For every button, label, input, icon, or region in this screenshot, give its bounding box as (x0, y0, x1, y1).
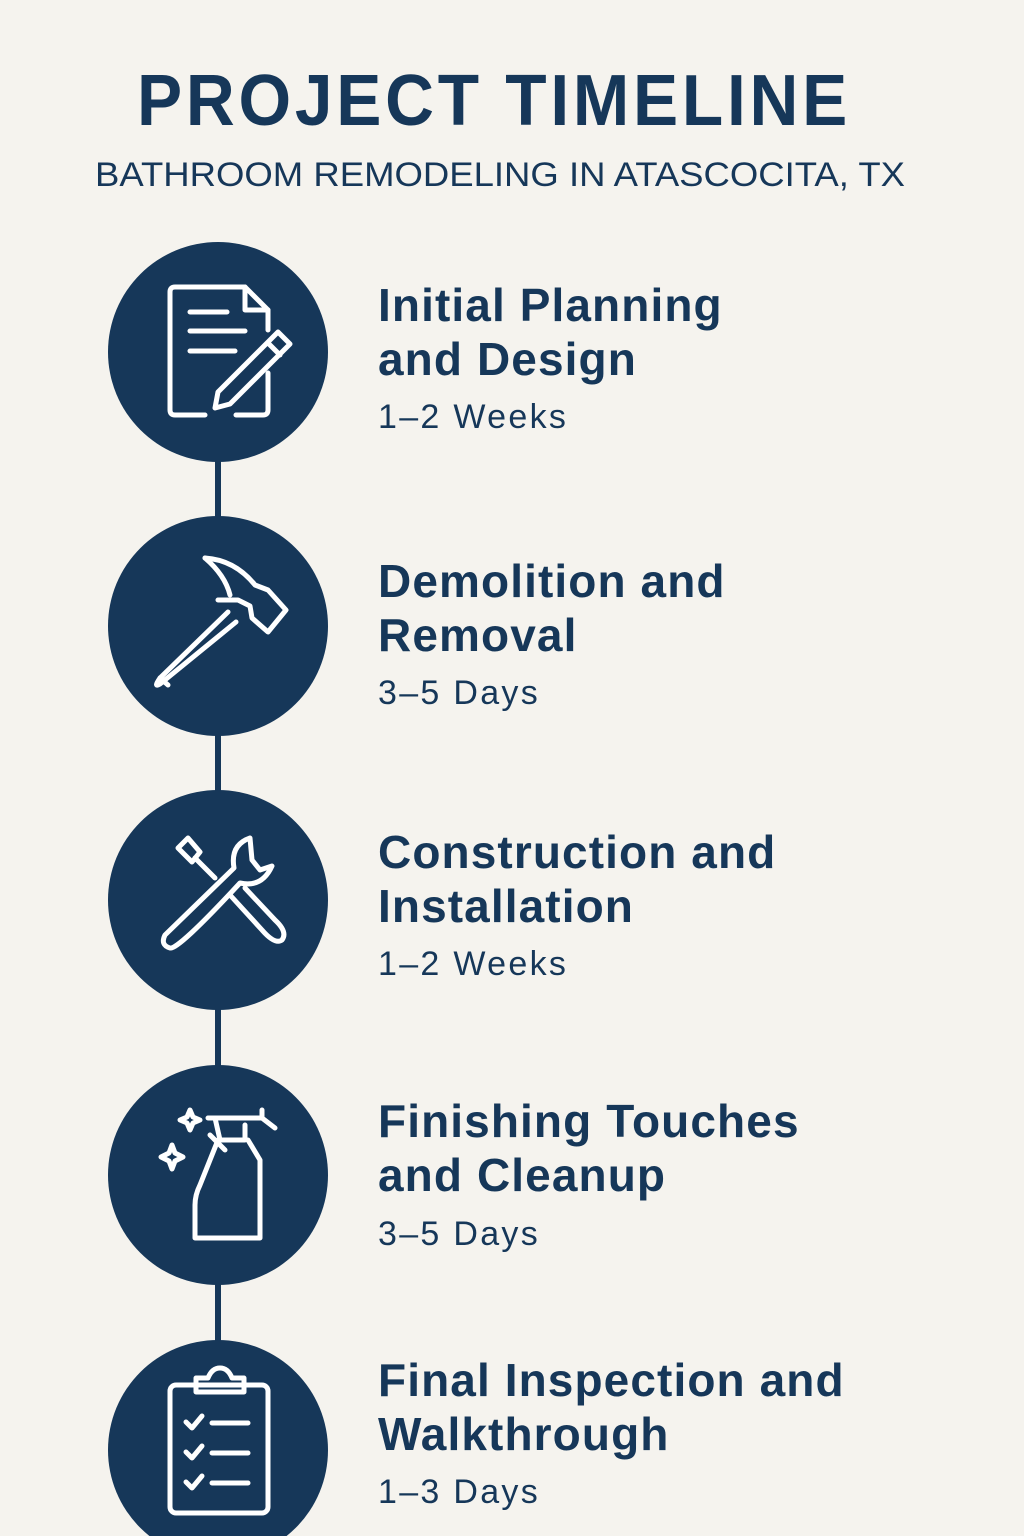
step 1 heading: Initial Planning (378, 279, 723, 331)
step 1: planning (108, 242, 723, 462)
step 3 duration: 1–2 Weeks (378, 945, 568, 983)
icon: document with pencil (108, 242, 328, 462)
icon: wrench and screwdriver (108, 790, 328, 1010)
step 2: demolition: Removal (378, 609, 577, 661)
step 1: planning: and Design (378, 333, 637, 385)
step 3: construction (108, 790, 776, 1010)
step 4: finishing: and Cleanup (378, 1149, 666, 1201)
icon: clipboard checklist (108, 1340, 328, 1536)
subtitle: BATHROOM REMODELING IN ATASCOCITA, TX (95, 156, 905, 194)
step 2 heading: Demolition and (378, 555, 726, 607)
step 4 duration: 3–5 Days (378, 1215, 540, 1253)
step 1 duration: 1–2 Weeks (378, 398, 568, 436)
step 3 heading: Construction and (378, 826, 776, 878)
step 5: inspection: Walkthrough (378, 1408, 669, 1460)
step 5: inspection (108, 1340, 845, 1536)
step 2 duration: 3–5 Days (378, 674, 540, 712)
step 5 heading: Final Inspection and (378, 1354, 845, 1406)
icon: hammer (108, 516, 328, 736)
step 2: demolition (108, 516, 726, 736)
icon: spray bottle with sparkles (108, 1065, 328, 1285)
step 3: construction: Installation (378, 880, 634, 932)
step 5 duration: 1–3 Days (378, 1473, 540, 1511)
step 4 heading: Finishing Touches (378, 1095, 800, 1147)
title: PROJECT TIMELINE (137, 61, 851, 141)
step 4: finishing (108, 1065, 800, 1285)
timeline connector line (215, 440, 221, 1440)
